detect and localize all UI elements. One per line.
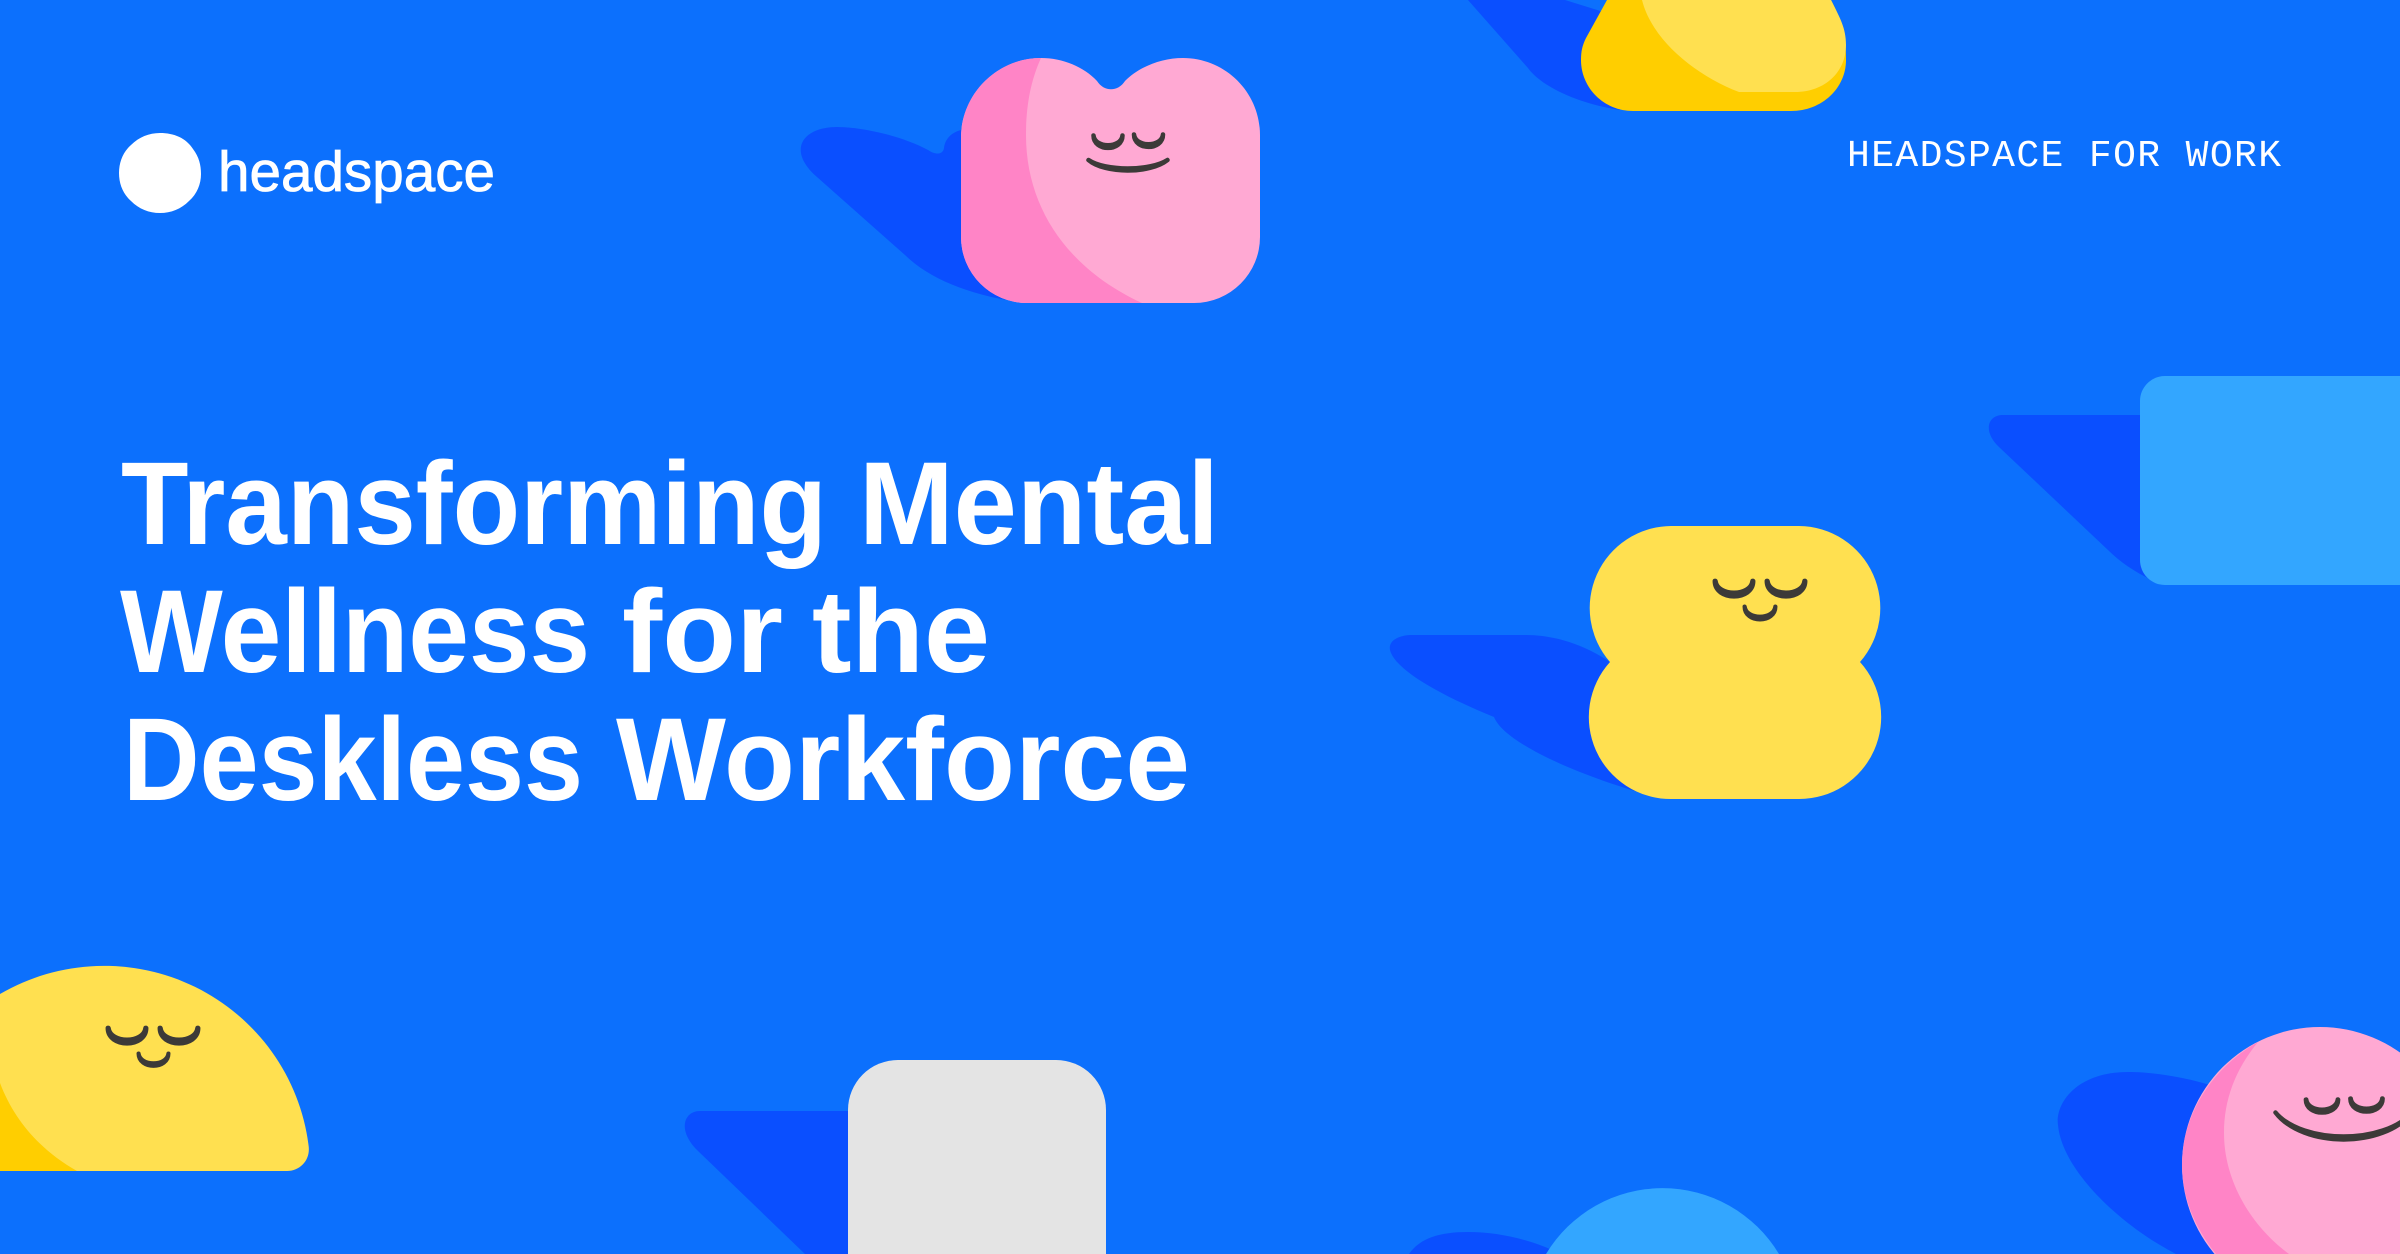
- icon: logo dot: [119, 133, 201, 213]
- label: headspace for work: HEADSPACE FOR WORK: [1847, 135, 2281, 178]
- title: Workforce: [616, 694, 1190, 826]
- title: Wellness: [120, 566, 590, 698]
- character: yellow double-lobed blob with wing: [1390, 526, 1881, 799]
- character: top yellow blob with wing: [1468, 0, 1846, 111]
- character: light blue rectangle with wing: [1989, 376, 2400, 585]
- character: bottom-right pink circle with wing: [2058, 1027, 2400, 1254]
- character: grey rounded block with wing: [685, 1060, 1106, 1254]
- title: Mental: [859, 438, 1219, 570]
- title: the: [812, 566, 990, 698]
- character: pink notched blob with wing: [801, 58, 1260, 303]
- character: bottom light blue dome with wing: [1409, 1188, 1779, 1254]
- title: Deskless: [123, 694, 583, 826]
- character: bottom-left yellow dome: [0, 966, 309, 1171]
- title: [120, 438, 1219, 826]
- title: Transforming: [121, 438, 827, 570]
- logo: headspace: [119, 133, 495, 213]
- logo wordmark: headspace: [218, 140, 495, 204]
- title: for: [622, 566, 783, 698]
